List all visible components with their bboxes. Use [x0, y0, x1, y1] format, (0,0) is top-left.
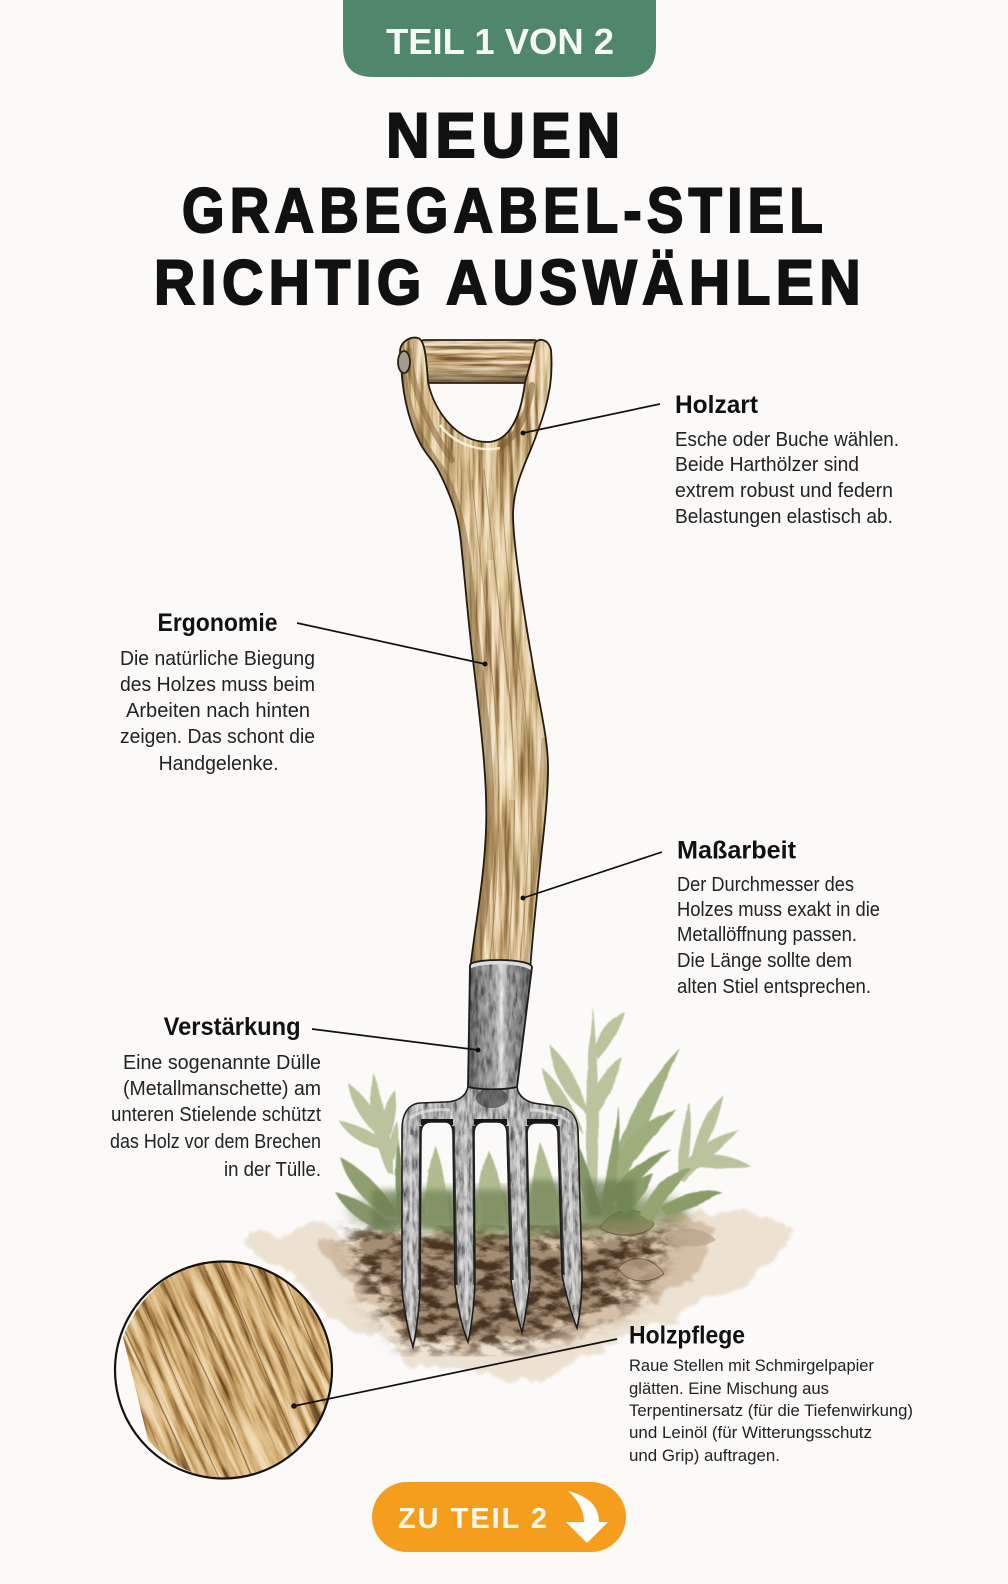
icon: rivet	[398, 351, 410, 373]
badge: part 1 of 2	[343, 0, 656, 77]
title: GRABEGABEL-STIEL	[182, 176, 828, 246]
illustration: grass	[335, 1007, 752, 1236]
button: to part 2	[372, 1482, 626, 1552]
text block: Holzart: Esche oder Buche wählen.	[675, 429, 899, 451]
text block: Verstärkung: in der Tülle.	[224, 1159, 321, 1181]
text block: Holzpflege: glätten. Eine Mischung aus	[629, 1379, 829, 1398]
text block: Holzart: extrem robust und federn	[675, 480, 893, 502]
text block: Holzpflege: und Leinöl (für Witterungsschutz	[629, 1423, 872, 1442]
title: NEUEN	[386, 101, 626, 171]
illustration: fork head with four tines	[395, 1085, 590, 1355]
text block: Ergonomie	[120, 609, 315, 775]
text block: Maßarbeit: Die Länge sollte dem	[677, 950, 852, 972]
text block: Verstärkung: unteren Stielende schützt	[111, 1104, 321, 1126]
text block: Holzpflege	[629, 1322, 913, 1465]
leader line: Holzpflege	[291, 1339, 617, 1409]
text block: Verstärkung: das Holz vor dem Brechen	[110, 1131, 321, 1153]
title: RICHTIG AUSWÄHLEN	[154, 248, 866, 318]
illustration: wooden handle and shaft	[397, 336, 552, 970]
text block: Verstärkung: (Metallmanschette) am	[123, 1078, 321, 1100]
detail circle: wood grain close-up	[114, 1260, 334, 1480]
text block: Maßarbeit: Holzes muss exakt in die	[677, 899, 880, 921]
leader line: Verstärkung	[312, 1029, 480, 1052]
leader line: Maßarbeit	[520, 852, 662, 900]
text block: Maßarbeit: alten Stiel entsprechen.	[677, 976, 871, 998]
text block: Ergonomie: des Holzes muss beim	[120, 674, 315, 696]
text block: Holzpflege: Raue Stellen mit Schmirgelpapier	[629, 1356, 874, 1375]
text block: Verstärkung: Verstärkung	[164, 1013, 301, 1041]
text block: Holzart	[675, 391, 899, 528]
infographic page	[110, 0, 912, 1552]
illustration: metal socket	[467, 959, 533, 1090]
text block: Ergonomie: Handgelenke.	[159, 753, 279, 775]
title	[154, 101, 866, 318]
text block: Holzpflege: und Grip) auftragen.	[629, 1446, 780, 1465]
badge: part 1 of 2: TEIL 1 VON 2	[386, 21, 614, 62]
text block: Ergonomie: Die natürliche Biegung	[120, 648, 315, 670]
text block: Maßarbeit: Der Durchmesser des	[677, 874, 854, 896]
text block: Maßarbeit: Metallöffnung passen.	[677, 924, 857, 946]
button: to part 2: ZU TEIL 2	[398, 1503, 547, 1535]
text block: Holzpflege: Terpentinersatz (für die Tiefenwirkung)	[629, 1401, 913, 1420]
text block: Verstärkung	[110, 1013, 321, 1181]
text block: Ergonomie: zeigen. Das schont die	[120, 726, 315, 748]
illustration: grip of the handle	[416, 340, 542, 383]
icon: curved arrow pointing down	[566, 1491, 608, 1543]
text block: Holzart: Belastungen elastisch ab.	[675, 506, 893, 528]
text block: Holzart: Holzart	[675, 391, 759, 419]
text block: Maßarbeit: Maßarbeit	[677, 836, 797, 864]
text block: Holzart: Beide Harthölzer sind	[675, 454, 859, 476]
text block: Ergonomie: Arbeiten nach hinten	[126, 700, 310, 722]
leader line: Ergonomie	[297, 623, 488, 666]
text block: Holzpflege: Holzpflege	[629, 1322, 745, 1350]
leader line: Holzart	[520, 404, 660, 436]
illustration: soil	[248, 1210, 788, 1377]
text block: Verstärkung: Eine sogenannte Dülle	[123, 1052, 321, 1074]
text block: Ergonomie: Ergonomie	[158, 609, 278, 637]
text block: Maßarbeit	[677, 836, 880, 998]
